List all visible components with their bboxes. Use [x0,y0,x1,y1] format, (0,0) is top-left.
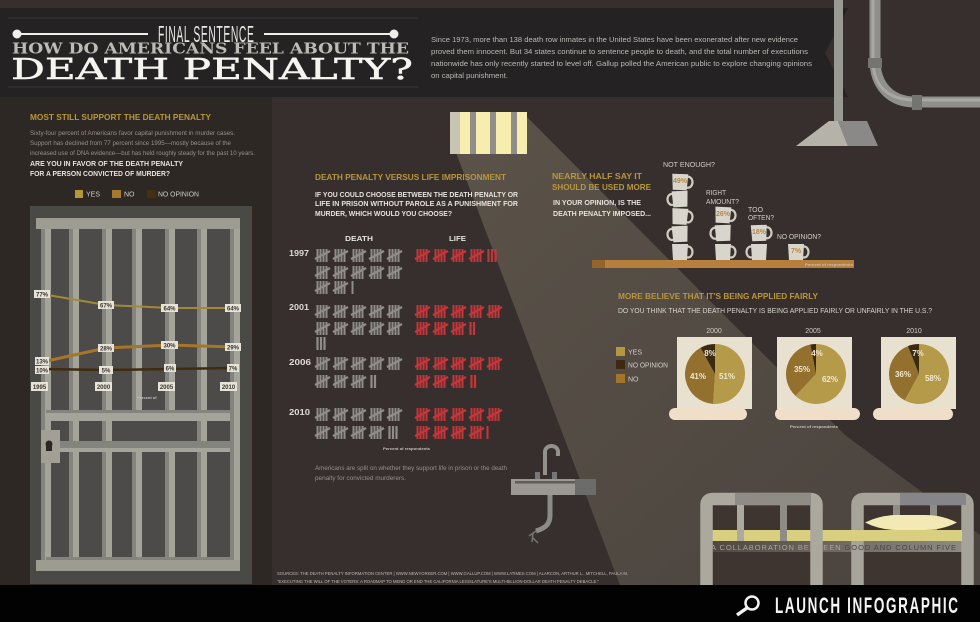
chart value labels: 7% [229,366,238,372]
year labels: 2010 [289,408,311,417]
column labels [345,234,466,243]
intro text [431,35,812,80]
pie 2010: 58% [925,374,941,383]
launch bar [0,585,980,622]
heading: DEATH PENALTY VERSUS LIFE IMPRISONMENT [315,172,507,182]
line chart [31,290,241,400]
shelf [592,260,854,268]
mug: no opinion [788,244,808,260]
credit strip [711,541,973,552]
no opinion line [42,368,233,370]
pie 2005: 4% [811,349,823,358]
light beam from window [455,117,980,585]
legend [75,190,199,198]
chart value labels: 2000 [97,385,111,391]
intro text: nationwide has only recently started to level off. Gallup polled the American public to explore changing opinions [431,59,812,68]
pie 2000: 8% [704,349,716,358]
mug labels: NOT ENOUGH? [663,162,715,169]
year labels [289,249,312,417]
pie 2010: 2010 [906,328,922,335]
bed [706,493,973,585]
cell door [30,206,252,584]
body text: Sixty-four percent of Americans favor capital punishment in murder cases. [30,130,235,137]
ceiling lamp [796,0,878,146]
panel: nearly half [552,162,854,268]
heading [552,171,651,192]
mug stack: right amount: 26% [716,211,731,218]
chart value labels: 77% [36,292,49,298]
intro text: proved them innocent. But 34 states continue to sentence people to death, and the total number of executions [431,47,808,56]
legend: NO OPINION [158,192,199,198]
question: FOR A PERSON CONVICTED OF MURDER? [30,169,170,178]
header banner [0,8,848,97]
chart value labels: 29% [227,346,240,352]
chart value labels: 1995 [33,385,47,391]
panel: death vs life [289,172,519,482]
icon: magnifier [737,596,758,615]
legend: NO OPINION [628,362,668,370]
left panel background [0,97,272,585]
chart value labels: 5% [102,368,111,374]
shelf: Percent of respondents [805,262,854,267]
question: IN YOUR OPINION, IS THE [553,198,641,207]
mug stack: right amount [710,207,736,260]
mattress [712,530,962,541]
question: LIFE IN PRISON WITHOUT PAROLE AS A PUNISHMENT FOR [315,199,519,208]
mug labels: OFTEN? [748,215,774,222]
question: IF YOU COULD CHOOSE BETWEEN THE DEATH PENALTY OR [315,190,519,199]
credit: A COLLABORATION BETWEEN GOOD AND COLUMN FIVE [711,543,956,552]
legend: YES [628,350,642,356]
chart value labels: 67% [100,304,113,310]
question: DO YOU THINK THAT THE DEATH PENALTY IS BEING APPLIED FAIRLY OR UNFAIRLY IN THE U.S.? [618,306,932,315]
pie 2005: 62% [822,375,838,384]
pie 2010: 36% [895,370,911,379]
takeaway text [315,465,507,482]
question [30,159,183,178]
death tallies [315,249,402,439]
heading: NEARLY HALF SAY IT [552,171,643,181]
chart value labels: 28% [100,346,113,352]
year labels: 2006 [289,358,312,367]
legend: YES [86,192,100,198]
year labels: 1997 [289,249,310,258]
chart value labels: 6% [166,366,175,372]
chart value labels: 2010 [222,385,236,391]
pie 2000: 51% [719,372,735,381]
right bed frame [858,493,968,585]
column labels: LIFE [449,234,466,243]
pie 2000: 41% [690,372,706,381]
kicker: FINAL SENTENCE [158,21,254,47]
panel: most still support [30,112,255,584]
chart value labels: 10% [36,368,49,374]
left bed frame [706,493,816,585]
sources: "EXECUTING THE WILL OF THE VOTERS: A ROADMAP TO MEND OR END THE CALIFORNIA LEGISLATURE'S MULTI-BILLION-DOLLAR DEATH PENALTY DEBACLE." [277,579,599,585]
pie 2000 [669,328,752,420]
title line 1: HOW DO AMERICANS FEEL ABOUT THE [12,40,409,58]
title line 2: DEATH PENALTY? [11,52,413,86]
heading: MORE BELIEVE THAT IT'S BEING APPLIED FAIRLY [618,291,818,301]
mug labels: RIGHT [706,190,727,197]
intro text: on capital punishment. [431,71,508,80]
question [553,198,651,218]
life tallies [415,249,502,439]
heading: MOST STILL SUPPORT THE DEATH PENALTY [30,112,211,122]
sources: SOURCES: THE DEATH PENALTY INFORMATION CENTER | WWW.NEWYORKER.COM | WWW.GALLUP.COM | WWW.LATIMES.COM | ALARCON, ARTHUR L., MITCHELL, PAULA M. [277,571,628,577]
takeaway text: Americans are split on whether they support life in prison or the death [315,465,507,472]
question: MURDER, WHICH WOULD YOU CHOOSE? [315,209,452,218]
panel: applied fairly [616,291,956,429]
chart value labels: 64% [163,306,176,312]
mug labels: AMOUNT? [706,199,739,206]
pie 2010: 7% [912,349,924,358]
chart value labels: 2005 [160,385,174,391]
pie 2005: 35% [794,365,810,374]
pie 2010 [873,328,956,420]
chart value labels: 30% [163,344,176,350]
heading: SHOULD BE USED MORE [552,182,651,192]
chart unit note: Percent of [137,395,157,400]
sink [511,446,596,543]
mug stack: not enough: 49% [673,178,688,185]
mug labels [663,162,821,241]
column labels: DEATH [345,234,373,243]
question: ARE YOU IN FAVOR OF THE DEATH PENALTY [30,159,183,168]
mug stack: too often [746,225,772,260]
body text: Support has declined from 77 percent since 1995—mostly because of the [30,140,231,147]
launch label: LAUNCH INFOGRAPHIC [775,592,958,618]
unit note: Percent of respondents [790,424,839,429]
pie 2005: 2005 [805,328,821,335]
pillow [865,515,957,530]
question: DEATH PENALTY IMPOSED... [553,209,651,218]
window [450,112,527,154]
door lock [41,430,60,463]
legend: NO [628,376,639,384]
sources [277,571,628,585]
year labels: 2001 [289,303,310,312]
mug stack: too often: 18% [752,229,767,236]
mug labels: TOO [748,207,764,214]
wall pipe [868,0,980,110]
pie 2005 [775,328,860,420]
legend [616,347,668,384]
chart value labels: 64% [227,306,240,312]
mug stack: not enough [667,174,693,260]
chart value labels [31,290,241,391]
title ornament lines [13,30,398,38]
legend: NO [124,192,135,198]
yes line [42,294,233,308]
no line [42,345,233,362]
mug: no opinion: 7% [791,248,802,255]
chart value labels: 13% [36,360,49,366]
takeaway text: penalty for convicted murderers. [315,475,406,482]
body text: increased use of DNA evidence—but has held roughly steady for the past 10 years. [30,150,255,157]
body text [30,130,255,157]
mug labels: NO OPINION? [777,234,821,241]
question [315,190,519,218]
unit note: Percent of respondents [383,446,431,451]
intro text: Since 1973, more than 138 death row inmates in the United States have been exonerated after new evidence [431,35,798,44]
pie 2000: 2000 [706,328,722,335]
